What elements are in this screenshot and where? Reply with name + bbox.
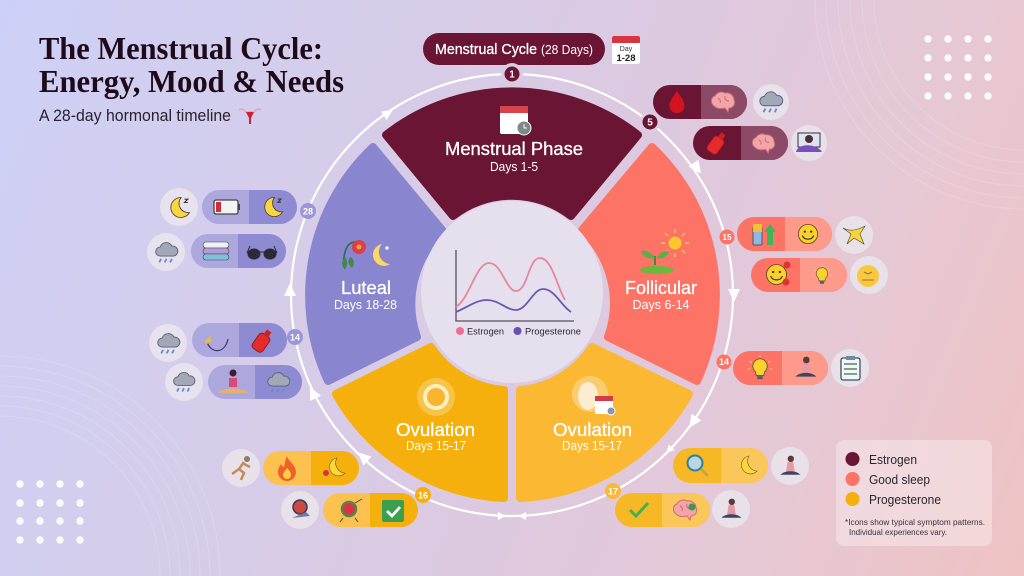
symptom row: menstrual 1	[653, 84, 789, 120]
icon: calendar day 1-28	[612, 36, 640, 64]
legend items: Progesterone	[869, 492, 941, 507]
icons	[174, 370, 290, 393]
label: luteal: Days 18-28	[334, 298, 397, 312]
chart legend: Progesterone	[525, 326, 581, 338]
symptom row: luteal 2	[147, 233, 286, 271]
symptom row: ovulation left 2	[281, 491, 418, 529]
chart legend: Estrogen	[467, 326, 504, 338]
badge 14 left: 14	[290, 332, 300, 342]
cycle ring	[291, 74, 733, 516]
decorative dots: bottom left	[16, 480, 84, 544]
label: ovulation left: Ovulation	[396, 420, 475, 440]
icon: calendar clock	[500, 106, 531, 135]
badge 17	[605, 483, 621, 499]
label: ovulation right: Ovulation	[553, 420, 632, 440]
icon: sprout and sun	[640, 229, 689, 274]
legend note: *Icons show typical symptom patterns.	[845, 518, 985, 527]
badge 1	[501, 63, 523, 85]
chart legend	[456, 326, 581, 338]
legend note: Individual experiences vary.	[849, 528, 947, 537]
label: luteal: Luteal	[341, 278, 391, 298]
icons	[766, 262, 879, 287]
symptom row: luteal 4	[165, 363, 302, 401]
icons	[753, 224, 865, 245]
legend items: Estrogen	[869, 452, 917, 467]
icons	[292, 499, 404, 522]
badge 1: 1	[509, 70, 515, 80]
label: ovulation right: Days 15-17	[562, 439, 622, 453]
progesterone curve	[456, 289, 571, 312]
icon: egg and calendar	[572, 376, 615, 415]
icons	[670, 91, 783, 113]
symptom row: luteal 1	[160, 188, 297, 226]
subtitle: A 28-day hormonal timeline	[39, 107, 231, 125]
label: follicular	[625, 278, 697, 312]
badge 5: 5	[647, 118, 653, 128]
badge 28	[300, 203, 316, 219]
icons	[706, 130, 822, 156]
symptom row: menstrual 2	[693, 125, 827, 161]
symptom row: follicular 3	[733, 349, 869, 387]
icons	[158, 327, 274, 354]
legend note	[845, 518, 985, 537]
legend	[836, 440, 992, 546]
badge 15	[720, 230, 734, 244]
panel: menstrual phase	[386, 91, 638, 216]
label: ovulation left: Days 15-17	[406, 439, 466, 453]
label: luteal	[334, 278, 397, 312]
badge 16	[415, 487, 431, 503]
badge 14 right: 14	[719, 357, 729, 367]
header pill	[423, 33, 605, 65]
icons	[232, 456, 345, 481]
panel: ovulation right	[520, 347, 689, 498]
panel: luteal	[309, 147, 443, 381]
estrogen curve	[456, 258, 565, 307]
decorative dots: top right	[924, 35, 992, 100]
icon: sun	[417, 378, 455, 416]
label: ovulation left	[396, 420, 475, 453]
badge 5	[640, 112, 660, 132]
label: menstrual phase	[445, 139, 583, 174]
icons	[171, 197, 283, 217]
panel: ovulation left	[336, 347, 504, 498]
symptom row: luteal 3	[149, 323, 287, 362]
label: ovulation right	[553, 420, 632, 453]
icon: calendar day 1-28: 1-28	[616, 53, 636, 64]
symptom row: ovulation left 1	[222, 449, 359, 487]
badge 14 left	[287, 329, 303, 345]
label: follicular: Follicular	[625, 278, 697, 298]
badge 28: 28	[303, 206, 313, 216]
legend items: Good sleep	[869, 472, 930, 487]
symptom row: ovulation right 1	[673, 447, 809, 485]
icons	[688, 456, 800, 476]
legend items	[846, 452, 941, 507]
chart axes	[456, 250, 574, 321]
title: The Menstrual Cycle:	[39, 30, 323, 66]
icons	[748, 355, 860, 380]
icons	[630, 499, 741, 520]
badge 15: 15	[723, 233, 732, 242]
icon: flower and moon	[342, 240, 390, 269]
label: follicular: Days 6-14	[632, 298, 690, 312]
label: menstrual phase: Menstrual Phase	[445, 139, 583, 159]
symptom row: ovulation right 2	[615, 490, 750, 528]
header pill: Menstrual Cycle	[435, 41, 537, 58]
title	[39, 30, 344, 99]
icons	[156, 242, 277, 262]
symptom row: follicular 2	[751, 256, 888, 294]
title: Energy, Mood & Needs	[39, 63, 344, 99]
badge 17: 17	[608, 486, 618, 496]
panel: hormone chart	[421, 201, 603, 383]
badge 16: 16	[418, 490, 428, 500]
label: menstrual phase: Days 1-5	[490, 160, 538, 174]
badge 14 right	[716, 354, 732, 370]
panel: follicular	[582, 147, 716, 381]
ring arrows	[284, 105, 740, 520]
header pill: (28 Days)	[541, 42, 593, 57]
icon: calendar day 1-28: Day	[620, 46, 633, 53]
symptom row: follicular 1	[737, 216, 873, 254]
icon: uterus	[239, 109, 261, 124]
